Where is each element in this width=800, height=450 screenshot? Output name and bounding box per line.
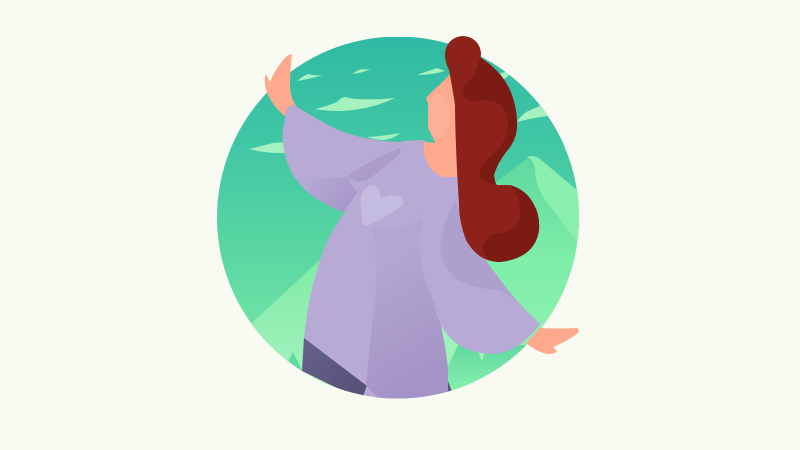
right sleeve shading: [440, 200, 518, 304]
heart on chest: [361, 185, 404, 226]
foreground hill darker: [448, 345, 525, 392]
mountain: right lit face: [527, 156, 579, 240]
chest fold: [347, 145, 408, 182]
trousers: [302, 337, 452, 400]
clouds: [249, 68, 548, 153]
hair shadow: lower: [483, 185, 539, 262]
mountain: right: [486, 158, 579, 345]
left sleeve: [283, 105, 400, 212]
left sleeve shading: [297, 177, 357, 212]
mountain: lower ridge light: [540, 302, 558, 327]
sweater body shading: [366, 210, 448, 400]
face: [424, 74, 462, 177]
right sleeve: [420, 195, 540, 354]
left hand: [265, 54, 296, 117]
pale spike: [478, 352, 484, 361]
gap green at feet: [363, 395, 380, 398]
hair: [445, 36, 539, 262]
hair top knot: [445, 36, 481, 72]
sweater neckline: [398, 140, 460, 230]
foreground hill highlight: [441, 326, 458, 366]
mountain: small peak: [288, 352, 303, 372]
mountain: left: [252, 260, 322, 382]
right hand: [526, 328, 579, 354]
body and sweater: [283, 105, 540, 402]
cheek: [428, 93, 450, 139]
hair shadow: upper: [463, 58, 517, 185]
foreground slope: [446, 348, 519, 392]
illustration: woman with open arms in a circle: [217, 36, 579, 398]
sweater body: [304, 142, 448, 402]
background circle scene: [217, 37, 585, 400]
